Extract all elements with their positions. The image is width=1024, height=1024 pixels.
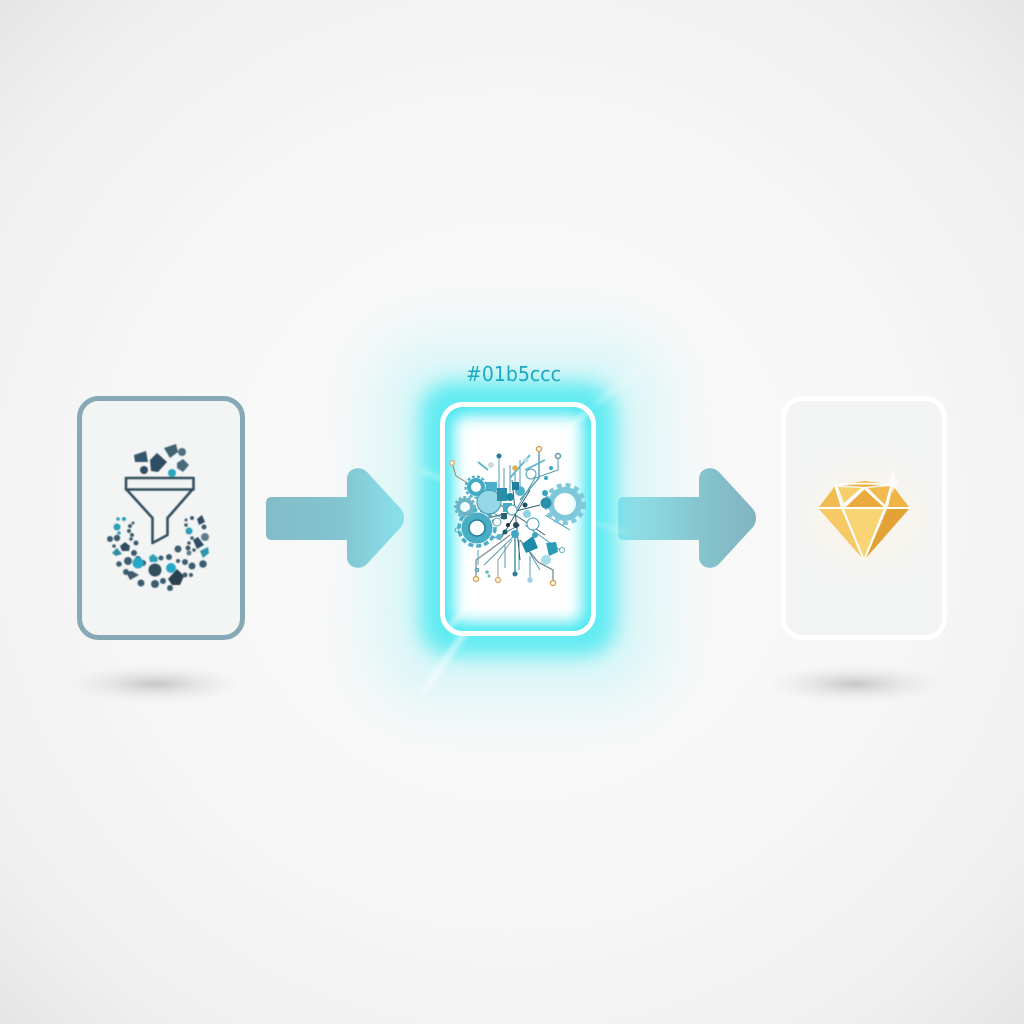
icon: gears and circuit network — [450, 446, 584, 586]
sparkle — [887, 466, 899, 494]
circuit traces — [452, 449, 570, 583]
panel: output card — [784, 398, 944, 638]
card inner — [442, 404, 594, 634]
diamond facets — [819, 486, 842, 507]
cyan glow halo — [372, 336, 664, 702]
terminal nodes — [450, 446, 560, 586]
panel: input card — [80, 398, 242, 638]
dense central cluster — [455, 458, 564, 578]
light rays — [420, 370, 640, 690]
diamond soft glow — [806, 465, 926, 565]
central disc — [477, 490, 501, 514]
icon: funnel with raw stones — [107, 444, 209, 591]
filtered stones below the funnel — [107, 515, 209, 591]
panel: glowing processing card — [372, 336, 664, 702]
funnel outline — [126, 478, 194, 543]
card border — [442, 404, 594, 634]
diamond white facet lines — [817, 484, 911, 558]
label: colour code: #01b5ccc — [466, 362, 561, 386]
arrow: input to processing — [266, 468, 404, 568]
raw stones above the funnel — [134, 444, 189, 477]
shadow: right card — [767, 665, 943, 703]
icon: gold diamond — [806, 465, 926, 565]
arrow: processing to output — [618, 468, 756, 568]
shadow: left card — [67, 665, 243, 703]
gears — [455, 476, 584, 546]
